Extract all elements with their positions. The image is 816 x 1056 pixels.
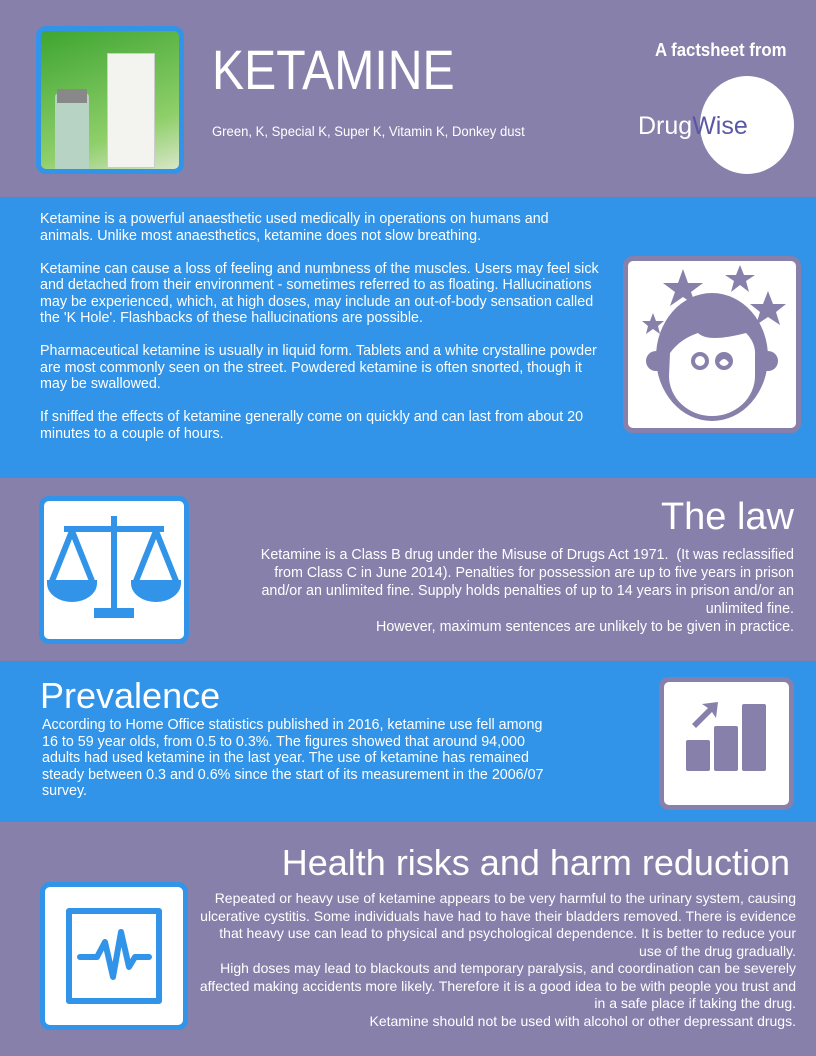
icon: bar chart: [659, 677, 794, 810]
icon: scales: [39, 496, 189, 644]
panel: intro: [0, 197, 816, 478]
intro text: If sniffed the effects of ketamine generally come on quickly and can last from about 20 minutes to a couple of hours.: [40, 409, 583, 442]
panel: prevalence: [0, 661, 816, 822]
intro text: Ketamine is a powerful anaesthetic used medically in operations on humans and animals. Unlike most anaesthetics, ketamine does not slow breathing.: [40, 211, 549, 244]
heading: health risks: Health risks and harm reduction: [282, 842, 790, 883]
law text: Ketamine is a Class B drug under the Misuse of Drugs Act 1971. (It was reclassified from Class C in June 2014). Penalties for possession are up to five years in prison and/or an unlimited fine. Supply holds penalties of up to 14 years in prison and/or an unlimited fine.: [261, 547, 794, 617]
panel: the law: [0, 478, 816, 661]
health text: Ketamine should not be used with alcohol or other depressant drugs.: [370, 1012, 796, 1028]
heading: prevalence: Prevalence: [40, 675, 220, 716]
title: KETAMINE: [212, 38, 455, 101]
icon: heartbeat: [40, 882, 188, 1030]
heading: the law: The law: [661, 496, 794, 538]
intro text: Pharmaceutical ketamine is usually in liquid form. Tablets and a white crystalline powder are most commonly seen on the street. Powdered ketamine is often snorted, though it may be swallowed.: [40, 343, 597, 392]
logo: DrugWise: DrugWise: [638, 112, 748, 140]
health text: [200, 890, 796, 1029]
factsheet credit: A factsheet from: [655, 40, 786, 60]
health text: High doses may lead to blackouts and temporary paralysis, and coordination can be severely affected making accidents more likely. Therefore it is a good idea to be with people you trust and in a safe place if taking the drug.: [200, 960, 796, 1011]
icon: dizzy face: [623, 256, 801, 433]
intro text: [40, 211, 599, 442]
panel: health risks: [0, 822, 816, 1056]
street names: Green, K, Special K, Super K, Vitamin K, Donkey dust: [212, 124, 525, 139]
header panel: [0, 0, 816, 197]
law text: However, maximum sentences are unlikely to be given in practice.: [376, 619, 794, 635]
health text: Repeated or heavy use of ketamine appears to be very harmful to the urinary system, causing ulcerative cystitis. Some individuals have had to have their bladders removed. There is evidence that heavy use can lead to physical and psychological dependence. It is better to reduce your use of the drug gradually.: [200, 890, 796, 958]
photo: ketamine vial: [36, 26, 184, 174]
logo: DrugWise: [638, 76, 794, 174]
intro text: Ketamine can cause a loss of feeling and numbness of the muscles. Users may feel sick and detached from their environment - sometimes referred to as floating. Hallucinations may be experienced, which, at high doses, may include an out-of-body sensation called the 'K Hole'. Flashbacks of these hallucinations are possible.: [40, 260, 599, 326]
prevalence text: According to Home Office statistics published in 2016, ketamine use fell among 16 to 59 year olds, from 0.5 to 0.3%. The figures showed that around 94,000 adults had used ketamine in the last year. The use of ketamine has remained steady between 0.3 and 0.6% since the start of its measurement in the 2006/07 survey.: [42, 717, 544, 799]
